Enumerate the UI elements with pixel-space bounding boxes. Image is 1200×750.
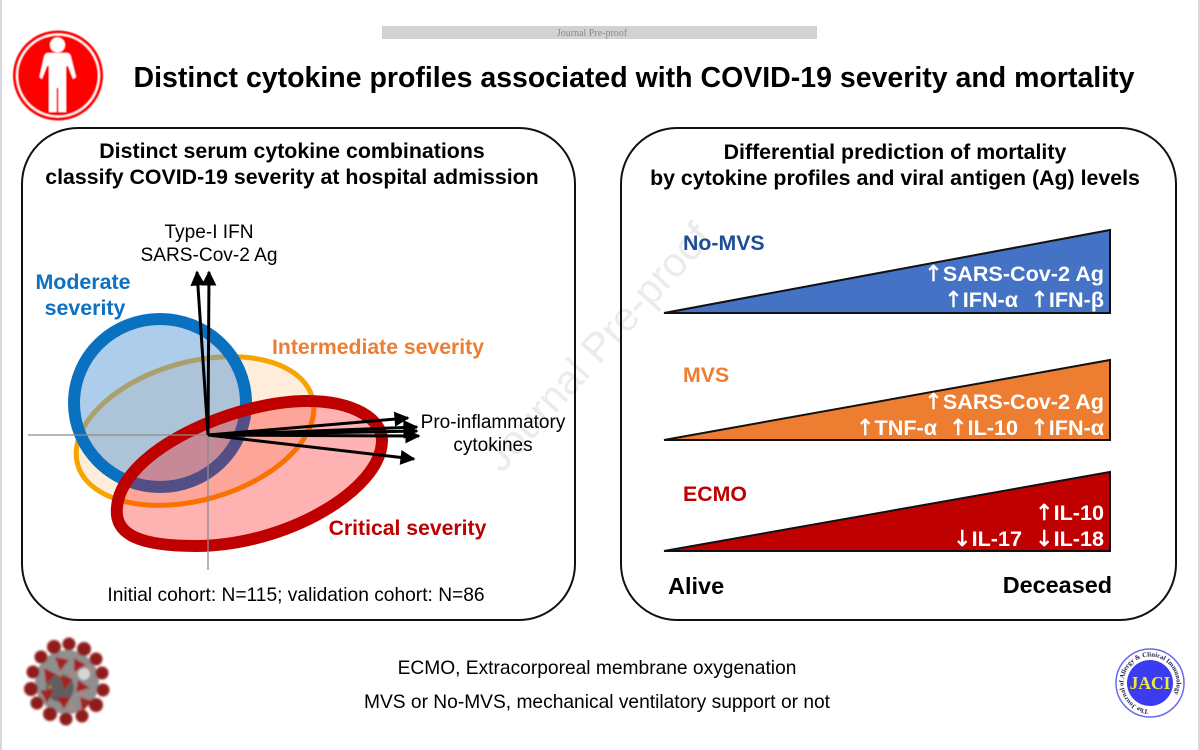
- wedge text: MVS: ↑IFN-α: [1030, 415, 1105, 441]
- label: intermediate severity: Intermediate severity: [272, 336, 484, 359]
- wedge text: MVS: ↑TNF-α: [856, 415, 938, 441]
- group: ECMO: [664, 472, 1110, 552]
- wedge text: ECMO: [953, 500, 1104, 552]
- journal pre-proof banner: [382, 26, 817, 39]
- wedge text: ECMO: ↓IL-17: [953, 526, 1022, 552]
- wedge: MVS: [664, 360, 1110, 440]
- label: Type-I IFN and SARS-Cov-2 Ag: Type-I IFN: [164, 222, 254, 243]
- wedge text: No-MVS: ↑IFN-α: [944, 287, 1019, 313]
- watermark: Journal Pre-proof: Journal Pre-proof: [474, 213, 720, 480]
- panel heading: severity: Distinct serum cytokine combinations: [99, 139, 485, 163]
- wedge text: No-MVS: ↑SARS-Cov-2 Ag: [924, 261, 1104, 287]
- panel: mortality prediction: [621, 128, 1176, 620]
- ellipse: critical severity: [117, 401, 382, 546]
- icon: JACI logo: The Journal of Allergy & Clinical Immunology: [1118, 652, 1182, 714]
- panel: severity classification: [22, 128, 575, 620]
- cohort note: Initial cohort: N=115; validation cohort: N=86: [107, 585, 485, 606]
- icon: coronavirus: [24, 638, 110, 726]
- wedge text: MVS: [856, 389, 1105, 441]
- axes: [28, 435, 208, 570]
- label: critical severity: Critical severity: [329, 517, 487, 540]
- wedge text: MVS: ↑SARS-Cov-2 Ag: [924, 389, 1104, 415]
- label: pro-inflammatory cytokines: cytokines: [453, 435, 533, 456]
- footnote: abbreviations: ECMO, Extracorporeal membrane oxygenation: [398, 658, 796, 679]
- footnote: abbreviations: MVS or No-MVS, mechanical ventilatory support or not: [364, 692, 831, 713]
- wedge text: No-MVS: [924, 261, 1104, 313]
- label: ECMO: ECMO: [683, 482, 747, 506]
- wedge text: ECMO: ↓IL-18: [1035, 526, 1104, 552]
- panel heading: mortality: by cytokine profiles and viral antigen (Ag) levels: [650, 166, 1140, 190]
- ellipse: moderate severity: [74, 319, 246, 487]
- label: MVS: MVS: [683, 363, 729, 387]
- wedge text: ECMO: ↑IL-10: [1035, 500, 1104, 526]
- label: Deceased: Deceased: [1003, 572, 1112, 598]
- group: MVS: [664, 360, 1110, 441]
- label: Alive: Alive: [668, 573, 724, 599]
- label: moderate severity: severity: [45, 296, 126, 320]
- label: Type-I IFN and SARS-Cov-2 Ag: SARS-Cov-2 Ag: [141, 245, 277, 266]
- panel heading: severity: classify COVID-19 severity at hospital admission: [45, 165, 539, 189]
- wedge text: No-MVS: ↑IFN-β: [1030, 287, 1104, 313]
- wedge: No-MVS: [664, 230, 1110, 313]
- title: Distinct cytokine profiles associated with COVID-19 severity and mortality: [134, 62, 1135, 94]
- arrows: biplot vectors: [197, 272, 419, 459]
- journal pre-proof banner: Journal Pre-proof: [557, 28, 628, 39]
- label: pro-inflammatory cytokines: Pro-inflammatory: [421, 412, 566, 433]
- group: No-MVS: [664, 230, 1110, 313]
- wedge: ECMO: [664, 472, 1110, 551]
- icon: person in red circle: [13, 30, 103, 120]
- panel heading: mortality: Differential prediction of mortality: [724, 140, 1066, 164]
- label: moderate severity: Moderate: [35, 270, 131, 294]
- label: No-MVS: No-MVS: [683, 231, 765, 255]
- wedge text: MVS: ↑IL-10: [949, 415, 1018, 441]
- ellipse: intermediate severity: [59, 331, 331, 531]
- icon: JACI logo: JACI: [1130, 673, 1171, 693]
